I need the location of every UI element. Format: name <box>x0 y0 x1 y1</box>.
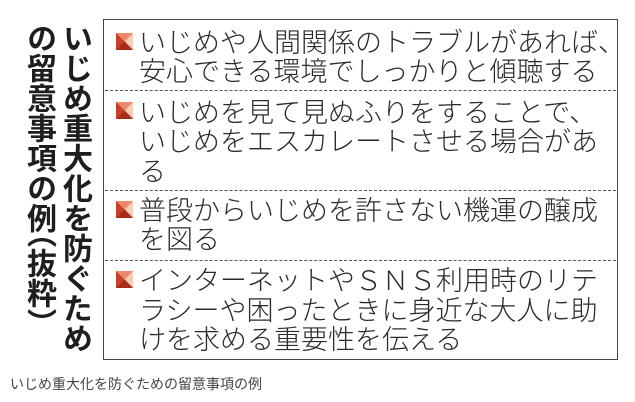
icon: bullet 3 <box>116 201 133 218</box>
item 4 line 1: インターネットやＳＮＳ利用時のリテ <box>139 266 598 296</box>
icon: bullet 2 <box>116 102 133 119</box>
item 1 line 2: 安心できる環境でしっかりと傾聴する <box>139 57 597 87</box>
item 3 line 2: を図る <box>139 225 220 255</box>
title: left column: の留意事項の例（ 抜粋 ） <box>22 23 55 323</box>
item 2 line 3: る <box>139 157 166 187</box>
item 4 line 2: ラシーや困ったときに身近な大人に助 <box>139 296 597 326</box>
item 2 line 2: いじめをエスカレートさせる場合があ <box>139 127 598 157</box>
panel: list of points <box>103 19 618 360</box>
icon: bullet 4 <box>116 271 133 288</box>
item 2 line 1: いじめを見て見ぬふりをすることで、 <box>139 98 596 128</box>
item 4 line 3: けを求める重要性を伝える <box>139 325 462 355</box>
icon: bullet 1 <box>116 33 133 50</box>
title: right column: いじめ重大化を防ぐため <box>58 23 91 353</box>
item 1 line 1: いじめや人間関係のトラブルがあれば、 <box>139 28 625 58</box>
item 3 line 1: 普段からいじめを許さない機運の醸成 <box>139 196 598 226</box>
caption: いじめ重大化を防ぐための留意事項の例 <box>10 376 262 392</box>
